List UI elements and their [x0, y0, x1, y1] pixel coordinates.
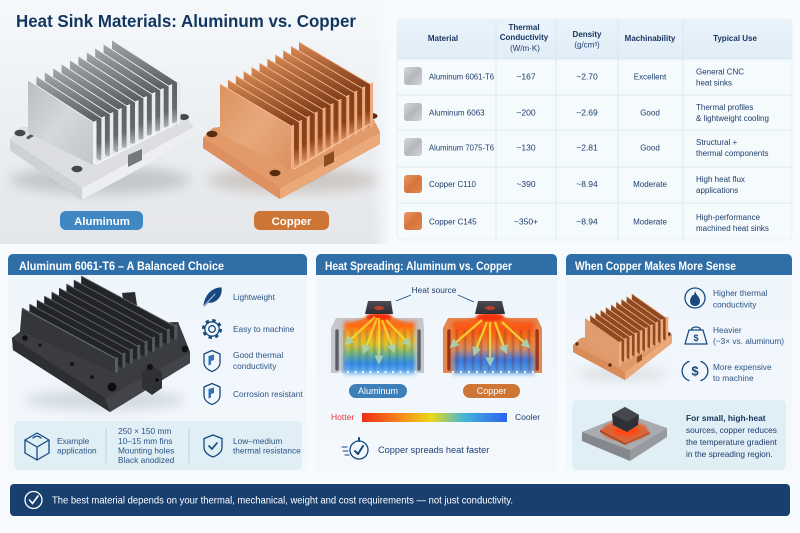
text: higher conductivity: Higher thermal [713, 288, 768, 298]
aluminum label [60, 211, 143, 230]
table header: Density [573, 30, 602, 39]
text: higher conductivity: conductivity [713, 300, 757, 310]
table header: (g/cm³) [574, 40, 600, 50]
row: Aluminum 7075-T6: Good [640, 144, 660, 152]
row: Aluminum 7075-T6: ~2.81 [576, 142, 598, 152]
thermal resistance text [233, 436, 301, 456]
text: good thermal conductivity: Good thermal [233, 350, 283, 360]
row: Aluminum 6061-T6: heat sinks [696, 78, 732, 88]
aluminum label: Aluminum [74, 216, 130, 228]
aluminum thermal diagram [331, 301, 424, 374]
copper label [254, 211, 329, 230]
row: Copper C110: ~390 [516, 179, 536, 189]
icon: check circle [25, 492, 42, 508]
row: Aluminum 6063: Thermal profiles [696, 103, 753, 112]
callout text: in the spreading region. [686, 449, 773, 459]
text: heavier: (~3× vs. aluminum) [713, 336, 784, 346]
row: Aluminum 7075-T6: Aluminum 7075-T6 [429, 144, 495, 152]
example label: Example [57, 436, 90, 446]
banner: conclusion [10, 484, 790, 516]
row: Copper C145: Moderate [633, 218, 667, 226]
text: expensive [713, 362, 772, 383]
specifications: Black anodized [118, 455, 175, 465]
row: Copper C110: applications [696, 186, 738, 195]
banner text: The best material depends on your thermal, mechanical, weight and cost requirements — not just conductivity. [52, 496, 513, 506]
copper label: Copper [477, 386, 506, 396]
row: Aluminum 6061-T6: ~2.70 [576, 72, 598, 82]
row: Copper C110: Moderate [633, 180, 667, 189]
callout: copper spreads heat faster: Copper spreads heat faster [378, 445, 489, 455]
text: expensive: to machine [713, 373, 754, 383]
legend: temperature scale [331, 412, 540, 422]
table header: Material [428, 34, 458, 43]
title: Heat Sink Materials: Aluminum vs. Copper [16, 11, 356, 31]
table header: (W/m·K) [510, 44, 540, 53]
aluminum heat sink [10, 40, 193, 200]
icon: stopwatch [342, 438, 368, 459]
row: Copper C145: ~350+ [514, 216, 538, 226]
row: Aluminum 6061-T6: General CNC [696, 68, 744, 76]
specifications: 250 × 150 mm [118, 426, 171, 436]
row: Aluminum 6063: Good [640, 108, 660, 118]
text: easy to machine: Easy to machine [233, 324, 295, 334]
copper label [463, 384, 520, 398]
icon: weight [685, 327, 707, 344]
table header: Typical Use [713, 34, 757, 43]
heading [316, 254, 557, 275]
row: Aluminum 6061-T6: Aluminum 6061-T6 [429, 72, 495, 82]
text: expensive: More expensive [713, 362, 772, 372]
text: good thermal conductivity: conductivity [233, 361, 277, 371]
row: Copper C145: Copper C145 [429, 218, 477, 226]
example application box [14, 421, 302, 470]
icon: thermal shield [204, 350, 220, 372]
row: Aluminum 6061-T6: Excellent [634, 72, 667, 82]
row: Aluminum 6061-T6: ~167 [516, 72, 536, 82]
heading: Heat Spreading: Aluminum vs. Copper [325, 259, 512, 273]
table: material comparison [397, 19, 792, 240]
graphic: heat spreader [582, 407, 667, 461]
text: good thermal conductivity [233, 350, 283, 371]
panel: when copper makes more sense [566, 254, 792, 473]
icon: dollar [682, 362, 708, 380]
specifications [118, 426, 175, 465]
icon: dollar: $ [691, 364, 699, 378]
text: heavier: Heavier [713, 325, 742, 335]
heat source label: Heat source [412, 285, 457, 295]
callout text: sources, copper reduces [686, 425, 777, 435]
heat source label [396, 285, 474, 302]
table header: Conductivity [500, 33, 549, 42]
icon: shield check [204, 435, 222, 457]
callout text: For small, high-heat [686, 413, 766, 423]
text: corrosion resistant: Corrosion resistant [233, 389, 303, 399]
callout text [686, 413, 778, 459]
icon: weight: $ [693, 333, 699, 343]
thermal resistance text: Low–medium [233, 436, 282, 446]
text: heavier [713, 325, 784, 346]
copper thermal diagram [443, 301, 542, 374]
heading: Aluminum 6061-T6 – A Balanced Choice [19, 259, 224, 273]
specifications: Mounting holes [118, 446, 174, 456]
row: Copper C110: Copper C110 [429, 180, 477, 189]
row: Aluminum 7075-T6: thermal components [696, 149, 768, 158]
table header [428, 23, 757, 53]
row: Copper C145: machined heat sinks [696, 224, 769, 233]
heading [566, 254, 792, 275]
row: Aluminum 6063: & lightweight cooling [696, 114, 769, 123]
specifications: 10–15 mm fins [118, 436, 172, 446]
row: Copper C110: ~8.94 [576, 179, 598, 189]
example label: application [57, 446, 97, 456]
row: Copper C145: High-performance [696, 213, 761, 222]
text: higher conductivity [713, 288, 768, 310]
table header: Thermal [508, 23, 540, 32]
row: Aluminum 6063 [404, 103, 769, 123]
callout text: the temperature gradient [686, 437, 778, 447]
row: Aluminum 6061-T6 [404, 67, 744, 88]
row: Copper C110 [404, 175, 745, 195]
thermal resistance text: thermal resistance [233, 446, 301, 456]
icon: box [25, 433, 49, 460]
icon: feather [203, 288, 221, 307]
table header: Machinability [625, 34, 676, 43]
icon: gear [203, 320, 221, 338]
icon: flame [685, 288, 705, 308]
heading [8, 254, 307, 275]
aluminum label: Aluminum [358, 386, 398, 396]
row: Copper C145 [404, 212, 769, 233]
row: Aluminum 6063: ~2.69 [576, 108, 598, 118]
copper label: Copper [272, 216, 312, 228]
panel: heat spreading [316, 254, 557, 473]
row: Copper C110: High heat flux [696, 175, 745, 184]
heading: When Copper Makes More Sense [575, 259, 736, 273]
black anodized heat sink [12, 276, 190, 412]
text: lightweight: Lightweight [233, 292, 276, 302]
row: Copper C145: ~8.94 [576, 216, 598, 226]
callout: small high-heat sources [572, 400, 786, 470]
hero: material photos [0, 0, 392, 244]
row: Aluminum 6063: Aluminum 6063 [429, 108, 485, 118]
row: Aluminum 6063: ~200 [516, 108, 536, 118]
copper heat sink [203, 42, 380, 199]
row: Aluminum 7075-T6: ~130 [516, 142, 536, 152]
row: Aluminum 7075-T6: Structural + [696, 138, 737, 147]
legend: temperature scale: Cooler [515, 412, 540, 422]
icon: corrosion shield [204, 384, 220, 404]
copper heat sink [573, 294, 672, 380]
aluminum label [349, 384, 407, 398]
row: Aluminum 7075-T6 [404, 138, 768, 158]
example label [57, 436, 97, 456]
legend: temperature scale: Hotter [331, 412, 354, 422]
panel: Aluminum 6061-T6 [8, 254, 792, 516]
